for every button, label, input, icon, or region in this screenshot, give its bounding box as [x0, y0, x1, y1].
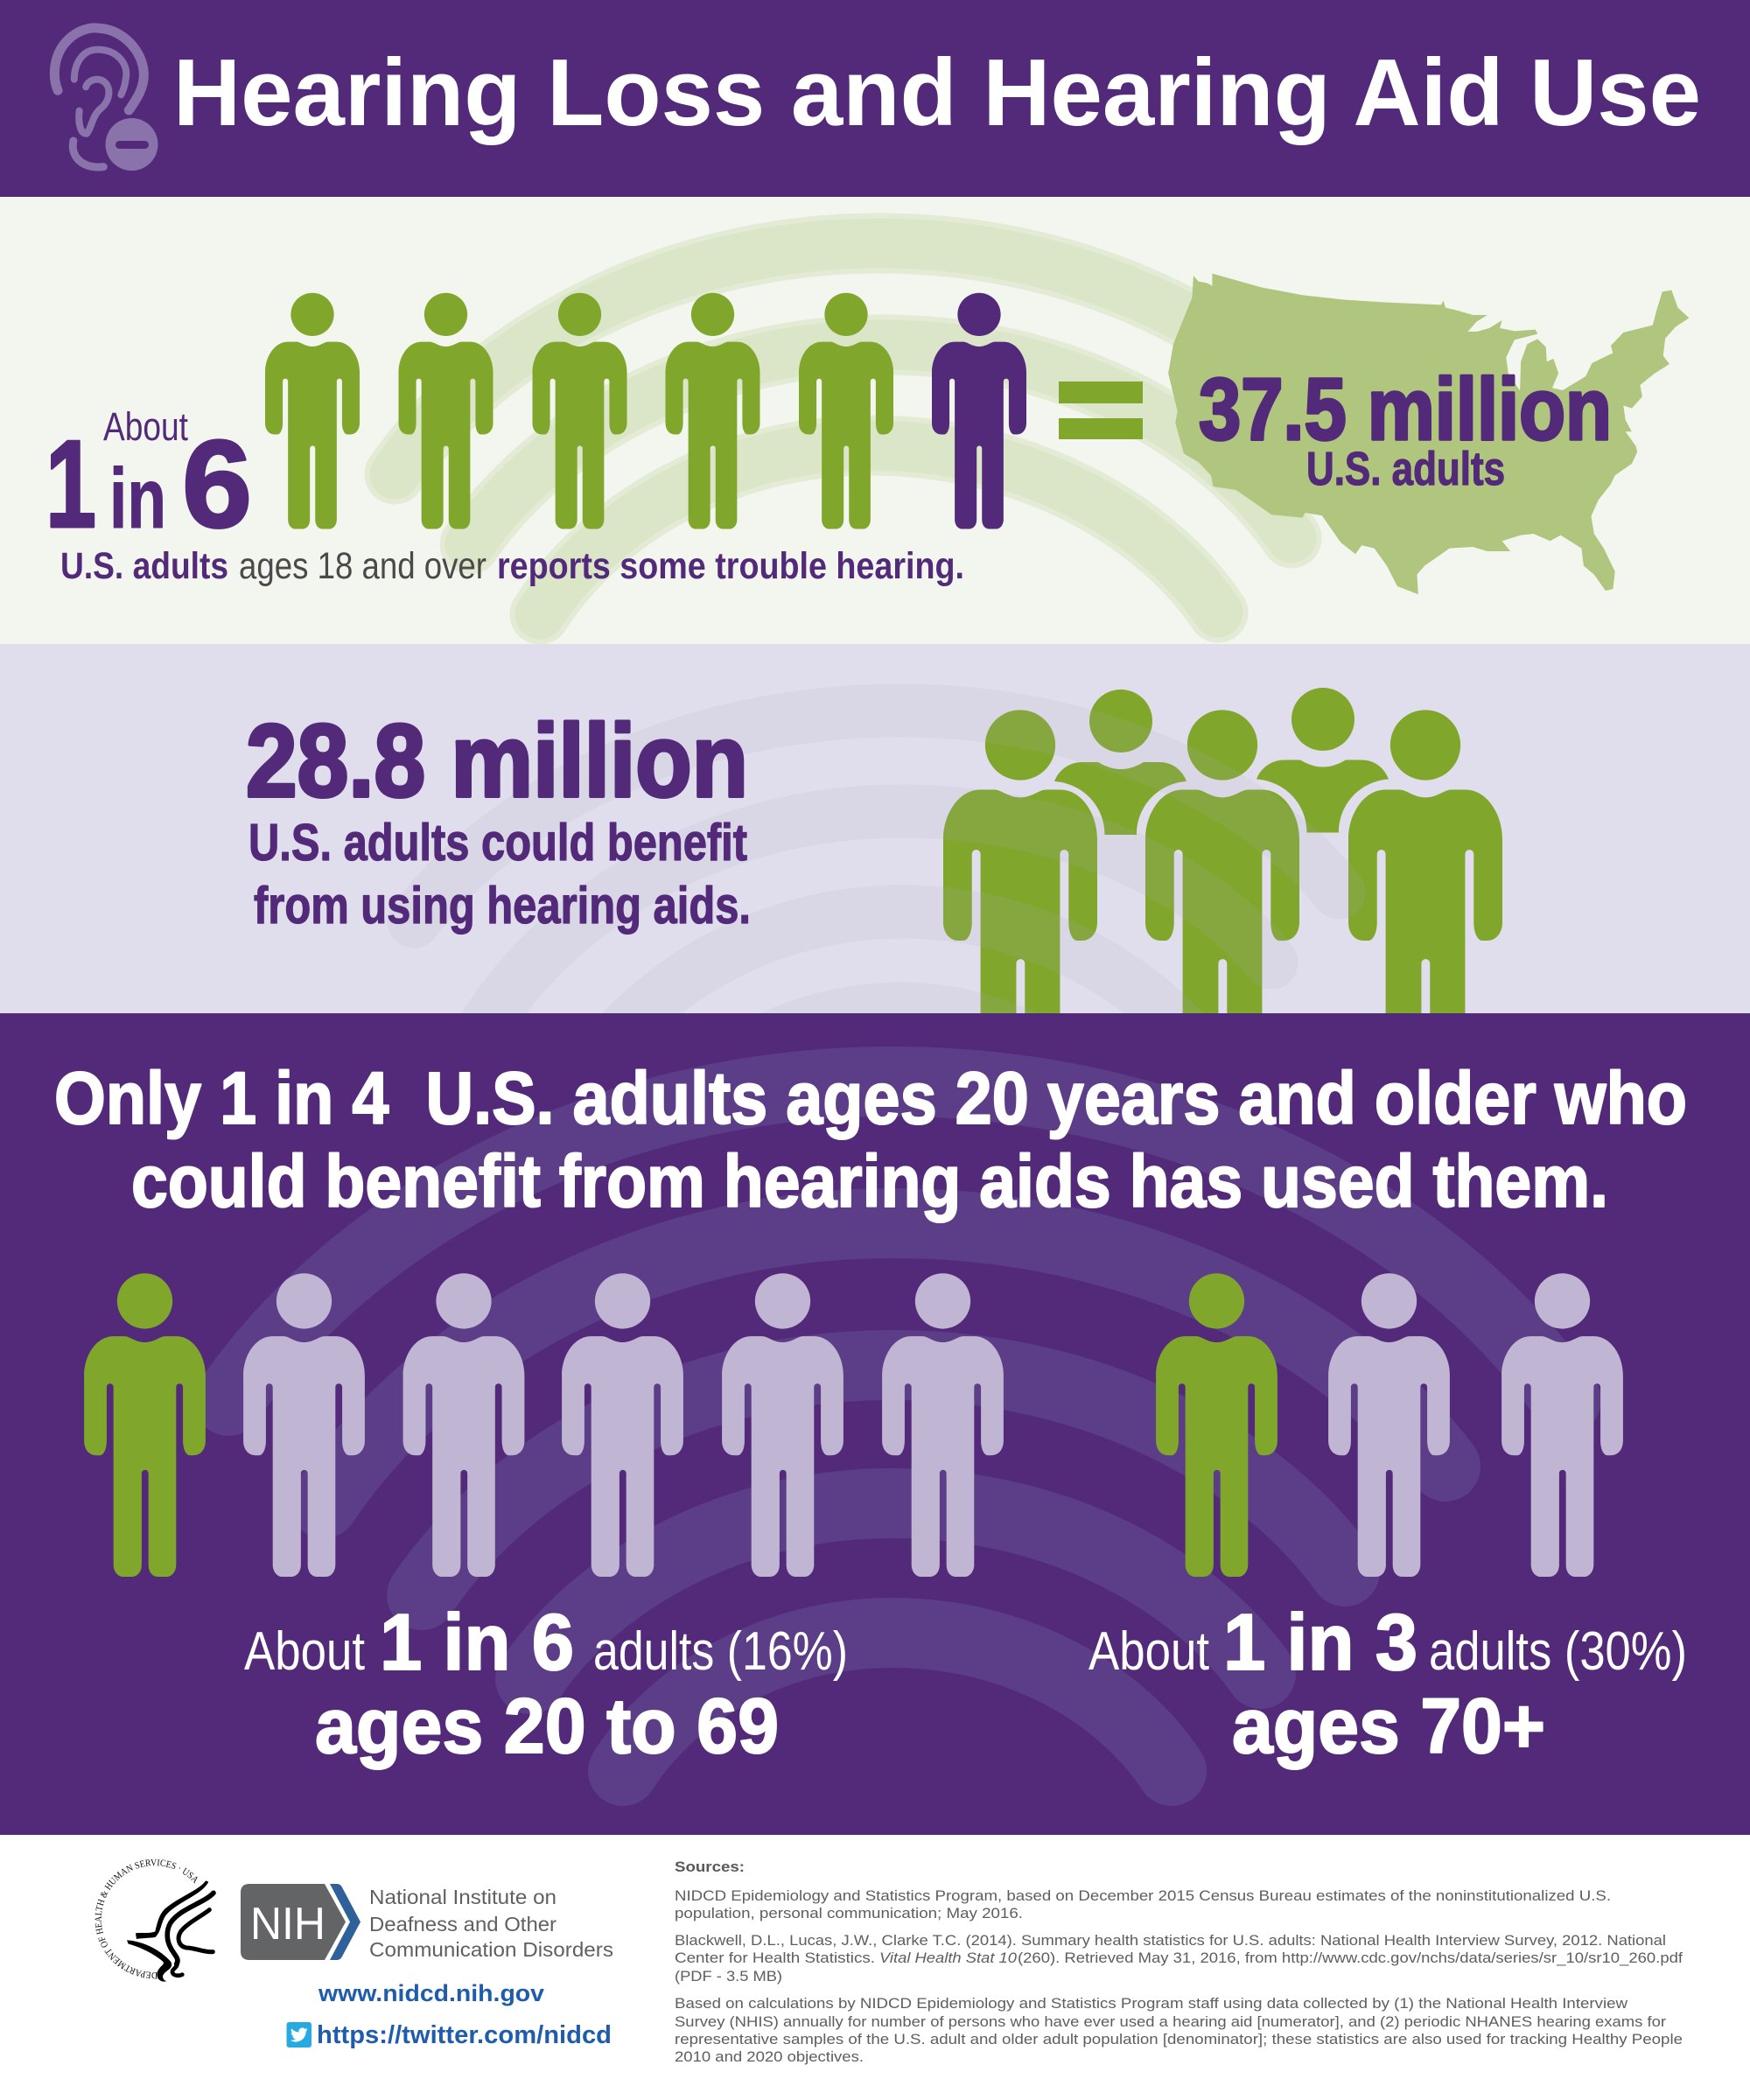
caption: adults reporting trouble hearing: U.S. adults — [60, 545, 228, 587]
icon: twitter — [287, 2022, 312, 2048]
title: Hearing Loss and Hearing Aid Use — [173, 39, 1701, 146]
website link: www.nidcd.nih.gov — [318, 1980, 544, 2006]
sources: population, personal communication; May 2016. — [675, 1905, 1023, 1922]
institute name: Deafness and Other — [369, 1913, 556, 1936]
logo: NIH — [241, 1884, 360, 1960]
background sound waves — [943, 710, 1365, 1013]
twitter link: https://twitter.com/nidcd — [317, 2021, 612, 2049]
caption: ages 70+: 1 in 3 — [1223, 1599, 1418, 1687]
caption: ages 20 to 69: adults (16%) — [593, 1621, 848, 1682]
panel: only 1 in 4 has used hearing aids — [0, 1013, 1750, 1835]
caption: ages 70+: ages 70+ — [1232, 1682, 1545, 1769]
1 in 6 statistic: in — [109, 451, 166, 546]
caption: ages 70+ — [1088, 1599, 1687, 1769]
sources: NIDCD Epidemiology and Statistics Program, based on December 2015 Census Bureau estimates of the noninstitutionalized U.S. — [675, 1887, 1611, 1904]
icon: HHS seal: DEPARTMENT OF HEALTH & HUMAN SERVICES · USA — [94, 1858, 198, 1979]
institute name: Communication Disorders — [369, 1938, 613, 1961]
caption: ages 70+: adults (30%) — [1429, 1621, 1687, 1682]
caption: adults reporting trouble hearing: ages 18 and over — [239, 545, 486, 587]
panel: 28.8 million could benefit — [0, 644, 1750, 1013]
footer — [94, 1858, 1684, 2065]
sources: Based on calculations by NIDCD Epidemiology and Statistics Program staff using data collected by (1) the National Health Interview — [675, 1995, 1628, 2012]
28.8 million statistic — [246, 704, 751, 934]
group of five people — [943, 688, 1502, 1095]
institute name: National Institute on — [369, 1886, 556, 1908]
28.8 million statistic: from using hearing aids. — [254, 877, 751, 934]
caption: ages 20 to 69: ages 20 to 69 — [315, 1682, 779, 1769]
heading — [54, 1057, 1687, 1222]
heading: could benefit from hearing aids has used them. — [131, 1140, 1608, 1222]
caption: ages 20 to 69 — [244, 1599, 848, 1769]
background sound waves — [228, 1082, 1566, 1771]
28.8 million statistic: U.S. adults could benefit — [248, 814, 747, 872]
37.5 million U.S. adults: 37.5 million — [1199, 360, 1612, 458]
sources: Sources: — [675, 1858, 745, 1875]
sources: representative samples of the U.S. adult and older adult population [denominator]; these statistics are also used for tracking Healthy People — [675, 2031, 1683, 2048]
caption: ages 20 to 69: About — [244, 1621, 365, 1682]
background sound waves — [395, 243, 1365, 614]
28.8 million statistic: 28.8 million — [246, 704, 748, 819]
sources: (260). Retrieved May 31, 2016, from http://www.cdc.gov/nchs/data/series/sr_10/sr10_260.pdf — [1018, 1950, 1683, 1966]
panel: 1 in 6 adults report trouble hearing — [0, 198, 1750, 644]
header band — [0, 0, 1750, 197]
institute name — [369, 1886, 613, 1961]
caption: adults reporting trouble hearing — [60, 545, 964, 587]
sources: (PDF - 3.5 MB) — [675, 1968, 782, 1984]
1 in 6 statistic — [46, 404, 252, 554]
1 in 6 statistic: 6 — [182, 415, 252, 554]
people: 1 in 3 ages 70+ — [1156, 1273, 1623, 1577]
1 in 6 statistic: About — [103, 404, 188, 449]
sources: Survey (NHIS) annually for number of persons who have ever used a hearing aid [numerator], and (2) periodic NHANES hearing exams for — [675, 2013, 1666, 2030]
1 in 6 statistic: 1 — [46, 415, 96, 554]
37.5 million U.S. adults — [1199, 360, 1612, 495]
sources: Blackwell, D.L., Lucas, J.W., Clarke T.C. (2014). Summary health statistics for U.S. adults: National Health Interview Survey, 2012. National — [675, 1932, 1666, 1949]
logo: NIH: NIH — [250, 1899, 326, 1950]
sources: 2010 and 2020 objectives. — [675, 2048, 864, 2065]
sources: Vital Health Stat 10 — [879, 1950, 1018, 1966]
row of six people, one highlighted — [265, 293, 1026, 528]
caption: adults reporting trouble hearing: reports some trouble hearing. — [497, 545, 964, 587]
people: 1 in 6 ages 20 to 69 — [84, 1273, 1004, 1577]
caption: ages 70+: About — [1088, 1621, 1209, 1682]
sources: Center for Health Statistics. — [675, 1950, 875, 1966]
icon: ear with minus sign — [54, 28, 158, 171]
icon: map of the United States — [1168, 274, 1689, 594]
sources — [675, 1858, 1683, 2065]
caption: ages 20 to 69: 1 in 6 — [380, 1599, 574, 1687]
equals sign — [1059, 382, 1143, 439]
37.5 million U.S. adults: U.S. adults — [1306, 443, 1505, 495]
